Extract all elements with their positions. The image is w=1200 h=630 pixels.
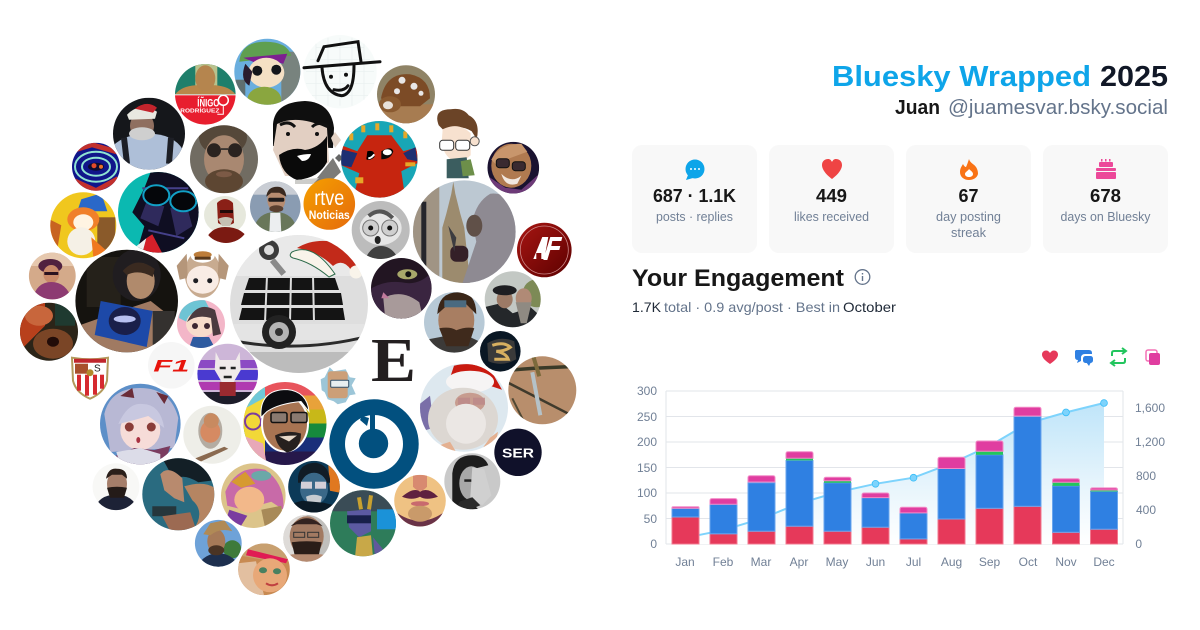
month labels: Apr (790, 555, 808, 569)
panel: day posting streak: 67 (958, 186, 978, 206)
avatar: rainbow caricature (243, 382, 327, 466)
avatar: rtve noticias logo: rtve (314, 187, 344, 210)
panel: posts and replies (632, 145, 757, 253)
panel: days on Bluesky: days on Bluesky (1060, 210, 1151, 224)
avatar: blue ring logo (329, 399, 419, 489)
panel: days on Bluesky: 678 (1090, 186, 1121, 206)
avatar: chibi girl (177, 300, 225, 348)
avatar: green cap cartoon (234, 38, 300, 105)
avatar: SER logo: SER (502, 445, 535, 460)
left axis labels: 200 (637, 435, 657, 449)
avatar: hooded figure and cathedral (412, 180, 516, 284)
icon: heart (822, 159, 842, 179)
avatar: El Espanol E logo: E (371, 327, 416, 395)
legend icons (1042, 348, 1160, 366)
month labels: Nov (1055, 555, 1077, 569)
avatar: scribble hat sketch (303, 35, 380, 108)
avatar: purple panther (370, 257, 432, 319)
avatar: purple glasses illustration (28, 252, 76, 300)
panel: likes received: 449 (816, 186, 847, 206)
avatar: daredevil (204, 196, 246, 243)
avatar: man covering eye (443, 452, 501, 510)
month labels: Oct (1019, 555, 1038, 569)
left axis labels: 50 (644, 512, 657, 526)
right axis labels: 1,200 (1135, 435, 1165, 449)
avatar: two bearded men (484, 271, 541, 328)
avatar: blue comic man (288, 461, 340, 513)
avatar: red and green poster: ÍÑIGO (197, 96, 220, 109)
avatar: cereal mascot (49, 191, 117, 259)
title: Bluesky Wrapped (832, 61, 1091, 93)
avatar: upside-down face (19, 302, 79, 362)
avatar: glasses cartoon boy (422, 108, 492, 178)
left axis labels (637, 384, 657, 551)
avatar cluster (19, 35, 577, 595)
month labels (675, 555, 1115, 569)
avatar: man with laptop (75, 249, 179, 353)
avatar: red and green poster: RODRÍGUEZ (180, 106, 220, 114)
left axis labels: 100 (637, 486, 657, 500)
avatar: spider-man comic (340, 120, 418, 198)
avatar: smiling glasses man (487, 142, 539, 194)
avatar: blonde cartoon with hat (238, 543, 290, 595)
panel: days on Bluesky (1043, 145, 1168, 253)
icon: quotes (1146, 350, 1160, 365)
avatar: burger hat girl (177, 249, 229, 298)
icon: reposts (1111, 348, 1126, 366)
avatar: bearded man in dark shirt (92, 463, 140, 511)
avatar: 4F red badge (517, 223, 572, 277)
stacked bars (672, 407, 1118, 544)
avatar: dalek with santa hat (229, 234, 369, 376)
icon: likes (1042, 350, 1058, 364)
avatar: watercolour robin (182, 405, 242, 465)
avatar: F1 logo (148, 342, 195, 389)
avatar: F1 logo: F1 (153, 356, 189, 375)
panel: posts and replies: 687 · 1.1K (653, 186, 736, 206)
avatar: glitch tiger (197, 343, 259, 406)
chart: monthly engagement (637, 384, 1165, 569)
avatar: tan wall with pen (507, 355, 577, 425)
month labels: Dec (1093, 555, 1115, 569)
panel: day posting streak: day posting (936, 210, 1001, 224)
cumulative area (685, 403, 1104, 544)
month labels: Jan (675, 555, 695, 569)
panel: likes received: likes received (794, 210, 869, 224)
avatar: bearded man split portrait (283, 514, 331, 562)
user name and handle: Juan (895, 97, 940, 119)
engagement summary: October (843, 299, 896, 315)
panel: day posting streak (906, 145, 1031, 253)
avatar: bearded man with phone on forehead (423, 291, 485, 353)
avatar: round sunglasses man (190, 119, 258, 193)
avatar: rtve noticias logo (304, 178, 355, 230)
left axis labels: 250 (637, 410, 657, 424)
left axis labels: 0 (650, 537, 657, 551)
month labels: May (826, 555, 848, 569)
panel: posts and replies: posts · replies (656, 210, 733, 224)
avatar: silver-haired anime (99, 383, 181, 465)
month labels: Jun (866, 555, 885, 569)
icon: chat bubble (686, 160, 704, 180)
icon: Sevilla FC crest (72, 358, 108, 399)
month labels: Sep (979, 555, 1000, 569)
right axis labels: 1,600 (1135, 401, 1165, 415)
avatar: gold emblem on dark (479, 330, 521, 372)
avatar: man in olive jacket (249, 181, 301, 233)
title: 2025 (1100, 61, 1168, 93)
avatar: santa claus (419, 363, 509, 453)
avatar: SER logo (494, 429, 542, 476)
avatar: vader with glasses (117, 170, 199, 253)
icon: replies (1075, 350, 1093, 366)
avatar: moustache close-up (394, 475, 446, 527)
avatar: plush armadillo (376, 64, 436, 124)
avatar: El Espanol E logo (355, 322, 431, 398)
user name and handle: @juamesvar.bsky.social (948, 97, 1168, 119)
left axis labels: 300 (637, 384, 657, 398)
right axis labels: 800 (1136, 469, 1156, 483)
avatar: red and green poster (174, 63, 236, 126)
avatar: santa stormtrooper (113, 98, 185, 170)
avatar: concentric pattern (72, 143, 120, 191)
panel: likes received (769, 145, 894, 253)
grid lines (666, 391, 1123, 544)
right axis labels: 400 (1136, 503, 1156, 517)
icon: Sevilla FC crest: S (94, 364, 101, 375)
icon: flame (960, 159, 978, 180)
engagement summary: 1.7K (632, 299, 662, 315)
icon: birthday cake (1096, 159, 1116, 179)
avatar: rtve noticias logo: Noticias (309, 208, 350, 222)
engagement summary: total · 0.9 avg/post · Best in (664, 299, 840, 315)
avatar: pink-haired pilot (220, 463, 286, 529)
heading: your engagement: Your Engagement (632, 265, 844, 292)
avatar: child in goggles (351, 200, 411, 260)
month labels: Aug (941, 555, 962, 569)
month labels: Mar (751, 555, 771, 569)
panel: day posting streak: streak (951, 226, 987, 240)
month labels: Feb (713, 555, 734, 569)
right axis labels: 0 (1135, 537, 1142, 551)
engagement summary (632, 299, 896, 315)
month labels: Jul (906, 555, 921, 569)
left axis labels: 150 (637, 461, 657, 475)
avatar: paper bag character (321, 367, 356, 404)
avatar: man in straw hat (194, 519, 242, 567)
right axis labels (1135, 401, 1165, 551)
avatar: spyro (329, 489, 397, 557)
avatar: bearded cartoon (264, 101, 346, 184)
avatar: woman with gun painting (141, 457, 215, 531)
cumulative line (685, 400, 1107, 538)
icon: info (855, 270, 870, 284)
